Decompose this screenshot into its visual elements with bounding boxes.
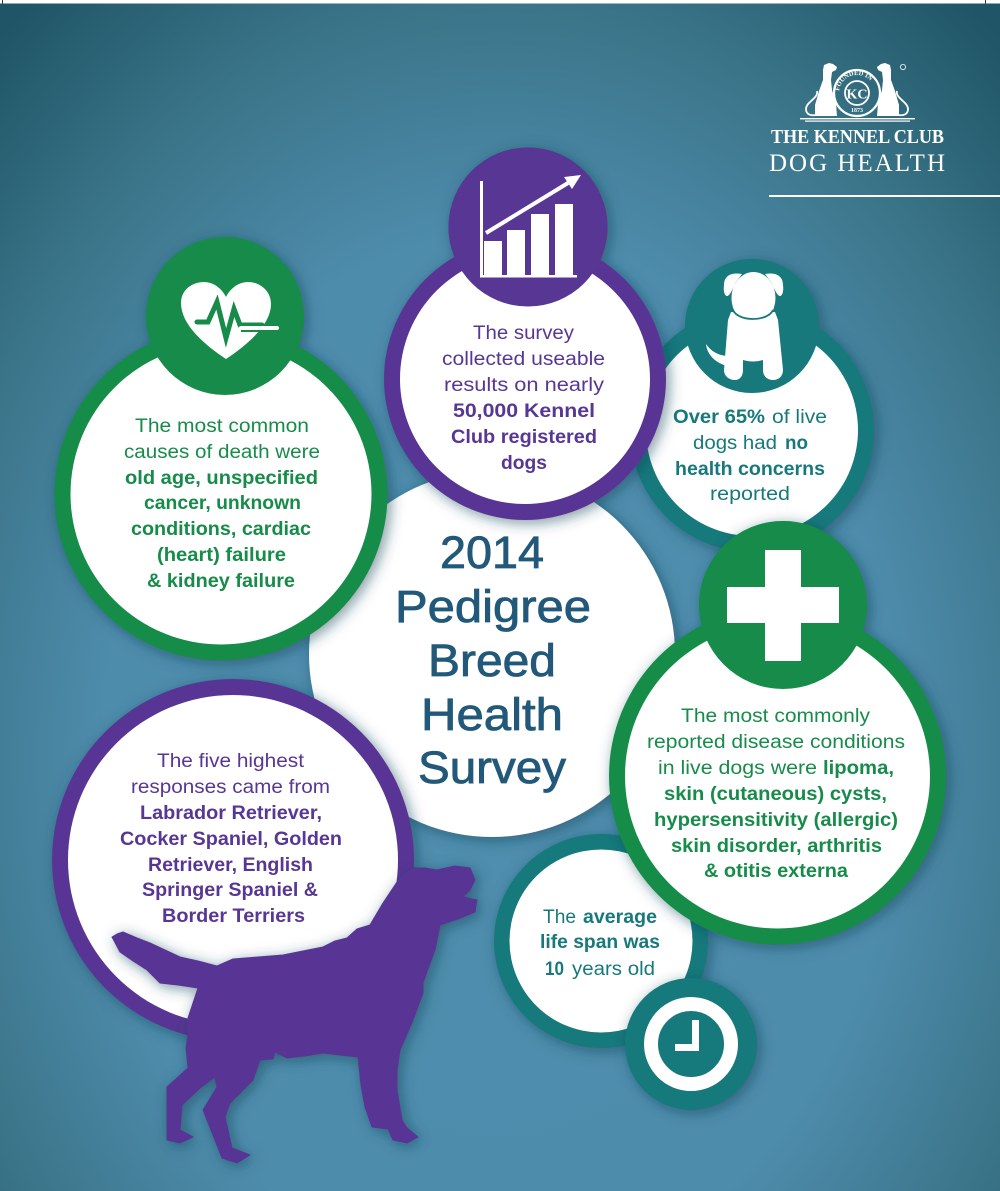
text: no health concerns: health concerns xyxy=(675,459,825,480)
text: disease conditions xyxy=(647,706,905,882)
panel: no health concerns xyxy=(630,259,874,552)
text: highest responses: responses came from xyxy=(131,777,330,798)
title: 2014 xyxy=(440,527,544,578)
title: Pedigree xyxy=(395,581,591,632)
text: average life span: years old xyxy=(572,959,655,980)
text: survey results xyxy=(442,323,605,474)
text: disease conditions: The most commonly xyxy=(681,706,871,727)
title xyxy=(395,527,591,793)
icon: clock xyxy=(625,978,757,1110)
text: no health concerns: no xyxy=(785,433,808,454)
icon: kennel club dogs and seal: KC xyxy=(846,88,868,102)
text: survey results: dogs xyxy=(501,453,547,474)
title: Health xyxy=(421,689,563,740)
text: average life span: average xyxy=(583,907,657,928)
icon: dog silhouette xyxy=(112,866,477,1163)
text: causes of death: cancer, unknown xyxy=(144,493,301,514)
text: disease conditions: skin disorder, arthritis xyxy=(671,836,882,857)
text: survey results: The survey xyxy=(473,323,575,344)
title: Survey xyxy=(418,742,567,793)
text: survey results: results on nearly xyxy=(444,375,605,396)
text: no health concerns: of live xyxy=(772,407,827,428)
logo text: The Kennel Club: THE KENNEL CLUB xyxy=(771,127,944,148)
text: no health concerns: dogs had xyxy=(693,433,777,454)
icon: kennel club dogs and seal: FOUNDED IN xyxy=(835,71,872,91)
text: average life span: life span was xyxy=(540,932,660,953)
panel: central title circle xyxy=(309,471,675,837)
text: causes of death: The most common xyxy=(135,416,309,437)
text: survey results: 50,000 Kennel xyxy=(453,401,595,422)
icon: heart with pulse xyxy=(181,282,277,359)
text: highest responses: Retriever, English xyxy=(148,855,313,876)
icon: rising bar chart xyxy=(480,175,581,278)
text: disease conditions: reported disease conditions xyxy=(647,732,905,753)
top white strip xyxy=(0,0,1000,4)
text: highest responses: The five highest xyxy=(157,751,305,772)
title: Breed xyxy=(428,635,556,686)
text: disease conditions: in live dogs were xyxy=(658,758,817,779)
icon: kennel club dogs and seal xyxy=(800,63,915,122)
text: average life span: 10 xyxy=(545,959,564,980)
text: causes of death xyxy=(124,416,320,592)
icon: medical cross xyxy=(727,550,839,661)
panel: causes of death xyxy=(54,237,388,660)
logo text: Dog Health: DOG HEALTH xyxy=(769,150,945,177)
text: highest responses xyxy=(120,751,342,927)
text: survey results: collected useable xyxy=(442,349,605,370)
panel: highest responses xyxy=(52,679,477,1163)
text: disease conditions: hypersensitivity (allergic) xyxy=(654,810,898,831)
text: causes of death: conditions, cardiac xyxy=(131,519,311,540)
text: survey results: Club registered xyxy=(451,427,597,448)
icon: puppy xyxy=(706,272,783,380)
text: disease conditions: & otitis externa xyxy=(704,861,848,882)
text: disease conditions: lipoma, xyxy=(823,758,894,779)
panel: average life span xyxy=(494,834,757,1110)
text: disease conditions: skin (cutaneous) cysts, xyxy=(664,784,887,805)
text: causes of death: (heart) failure xyxy=(157,545,286,566)
text: causes of death: causes of death were xyxy=(124,442,320,463)
text: no health concerns xyxy=(673,407,827,505)
text: causes of death: & kidney failure xyxy=(147,571,295,592)
text: causes of death: old age, unspecified xyxy=(125,468,318,489)
text: average life span xyxy=(540,907,660,980)
logo: The Kennel Club Dog Health xyxy=(769,63,1000,197)
panel: disease conditions xyxy=(609,521,946,944)
text: average life span: The xyxy=(543,907,576,928)
text: highest responses: Labrador Retriever, xyxy=(140,803,322,824)
icon: kennel club dogs and seal: 1873 xyxy=(851,108,863,114)
text: no health concerns: Over 65% xyxy=(673,407,765,428)
text: highest responses: Border Terriers xyxy=(162,906,305,927)
panel: survey results xyxy=(384,148,666,520)
text: highest responses: Springer Spaniel & xyxy=(142,880,318,901)
text: no health concerns: reported xyxy=(710,484,790,505)
text: highest responses: Cocker Spaniel, Golden xyxy=(120,829,342,850)
logo rule xyxy=(769,195,1000,197)
